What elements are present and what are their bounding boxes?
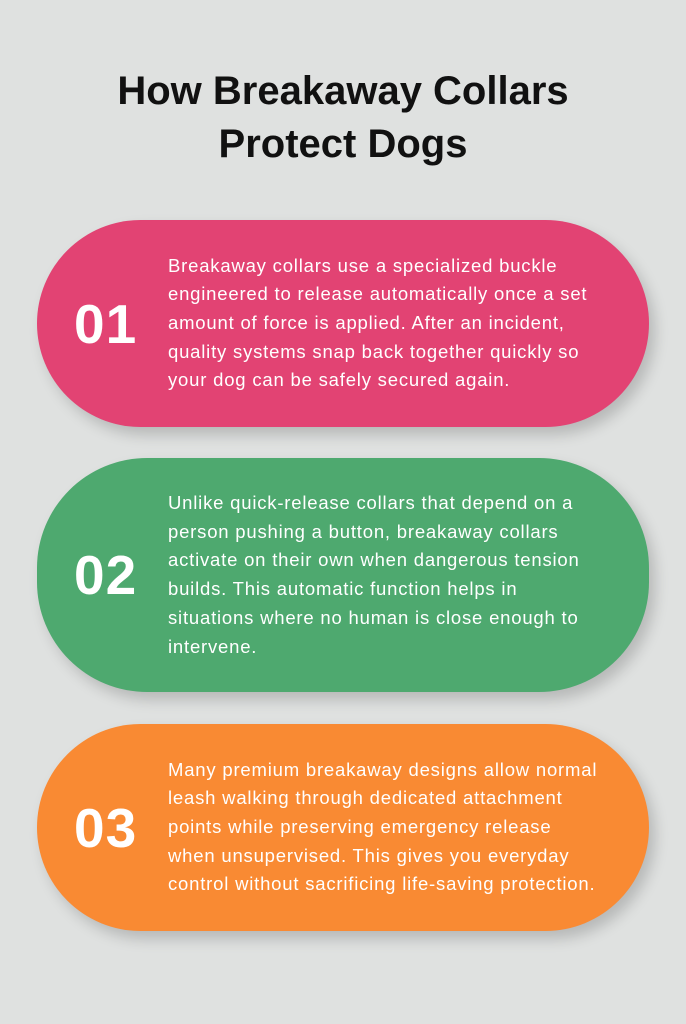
panel: 03 leash walking — [37, 724, 649, 931]
text block 03: leash walking through dedicated attachment — [168, 787, 563, 808]
panel: 02 self-activating — [37, 458, 649, 692]
text block 03: Many premium breakaway designs allow normal — [168, 759, 597, 780]
text block 02: builds. This automatic function helps in — [168, 578, 517, 599]
title: Protect Dogs — [219, 122, 467, 166]
text block 02: situations where no human is close enough to — [168, 607, 579, 628]
text block 02: Unlike quick-release collars that depend on a — [168, 492, 573, 513]
number 03: 03 — [74, 796, 137, 858]
text block 02: intervene. — [168, 635, 257, 656]
text block 01: amount of force is applied. After an incident, — [168, 312, 565, 333]
text block 02 — [168, 492, 580, 656]
panel: 01 automatic release — [37, 220, 649, 427]
text block 02: activate on their own when dangerous tension — [168, 549, 580, 570]
text block 03 — [168, 759, 597, 895]
text block 01: quality systems snap back together quickly so — [168, 341, 579, 362]
text block 03: points while preserving emergency release — [168, 816, 551, 837]
text block 01: your dog can be safely secured again. — [168, 370, 510, 391]
text block 01 — [168, 255, 587, 391]
title: How Breakaway Collars — [117, 69, 569, 113]
text block 01: engineered to release automatically once a set — [168, 283, 587, 304]
number 02: 02 — [74, 544, 137, 606]
title — [117, 69, 569, 166]
number 01: 01 — [74, 292, 137, 354]
text block 01: Breakaway collars use a specialized buckle — [168, 255, 557, 276]
text block 03: control without sacrificing life-saving protection. — [168, 874, 595, 895]
text block 03: when unsupervised. This gives you everyday — [168, 845, 569, 866]
text block 02: person pushing a button, breakaway collars — [168, 521, 558, 542]
